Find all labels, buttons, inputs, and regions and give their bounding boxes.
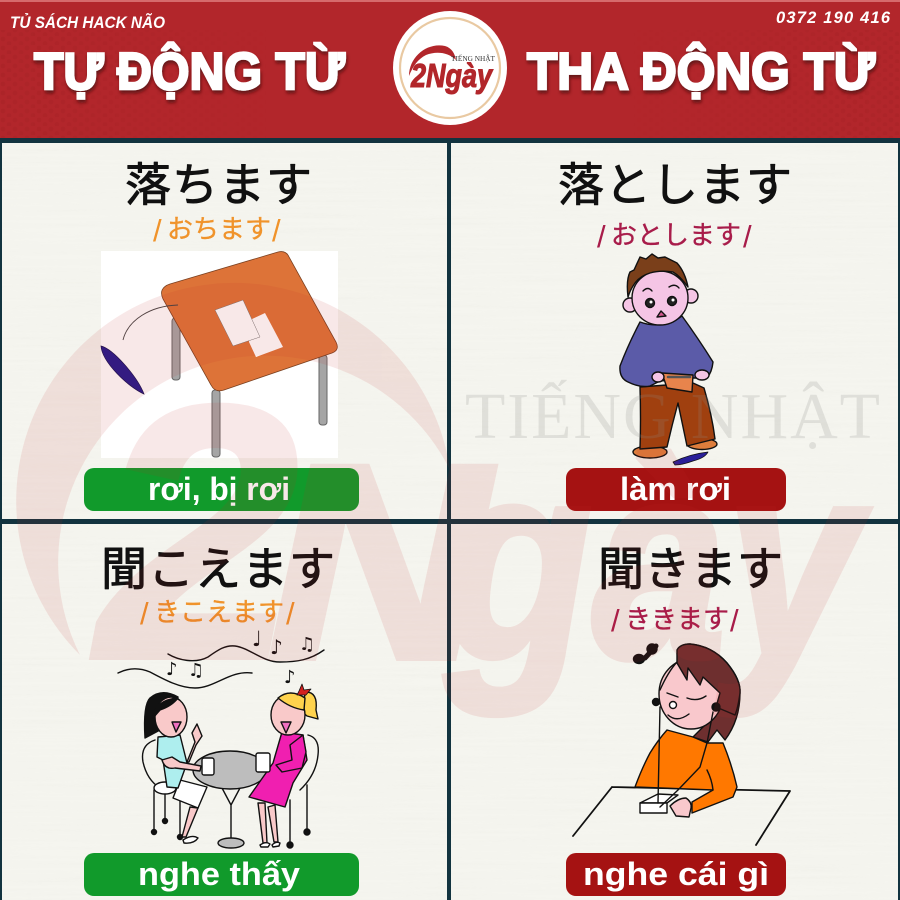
music notes: ♪ xyxy=(284,667,296,688)
reading: otoshimasu: おとします xyxy=(611,220,741,250)
watermark: 2Ngày logo: N xyxy=(268,409,496,716)
music notes: ♪ xyxy=(270,635,283,659)
reading: otoshimasu: / xyxy=(743,219,752,254)
label pill: roi, bi roi xyxy=(84,468,359,511)
illustration: woman listening with earphones xyxy=(573,644,790,845)
word: ochimasu: 落ちます xyxy=(125,159,312,211)
music notes xyxy=(166,627,315,688)
reading: kikimasu xyxy=(611,603,739,638)
logo: 2Ngày: 2Ngày xyxy=(410,57,493,94)
word: otoshimasu: 落とします xyxy=(558,159,792,211)
reading: kikimasu: ききます xyxy=(625,604,729,634)
reading: otoshimasu: / xyxy=(597,219,606,254)
reading: kikimasu: / xyxy=(730,603,739,638)
illustration: table with falling pen xyxy=(101,251,338,458)
reading: kikoemasu: きこえます xyxy=(154,597,284,627)
word: kikimasu: 聞きます xyxy=(598,543,783,595)
word: kikoemasu: 聞こえます xyxy=(101,543,335,595)
panel: top left, fall xyxy=(84,159,359,511)
panel: top right, drop xyxy=(558,159,792,511)
reading: ochimasu xyxy=(153,213,281,248)
illustration: boy dropping pen from pocket xyxy=(620,254,717,465)
label: phone number: 0372 190 416 xyxy=(776,9,891,27)
label pill: lam roi xyxy=(566,468,786,511)
label pill: lam roi: làm rơi xyxy=(620,471,731,507)
reading: ochimasu: おちます xyxy=(167,214,271,244)
music note xyxy=(645,646,656,658)
reading: kikoemasu: / xyxy=(140,596,149,631)
logo: 2Ngày: TIẾNG NHẬT xyxy=(451,53,495,63)
panel: bottom right, listen xyxy=(566,543,790,896)
label pill: nghe thay xyxy=(84,853,359,896)
heading: transitive verb: THA ĐỘNG TỪ xyxy=(527,42,876,101)
header banner xyxy=(0,0,900,138)
right chair xyxy=(290,735,318,845)
logo: 2Ngày xyxy=(393,11,507,125)
reading: ochimasu: / xyxy=(272,213,281,248)
panel: bottom left, audible xyxy=(84,543,359,896)
table xyxy=(222,788,240,840)
label pill: nghe thay: nghe thấy xyxy=(138,856,300,892)
reading: kikoemasu: / xyxy=(286,596,295,631)
music notes: ♩ xyxy=(252,627,262,651)
music notes: ♫ xyxy=(188,660,204,681)
music notes: ♫ xyxy=(299,634,315,655)
illustration: two women talking at a cafe table xyxy=(118,627,324,848)
watermark: Tieng Nhat: TIẾNG NHẬT xyxy=(465,379,880,453)
left chair xyxy=(142,740,180,837)
label pill: nghe cai gi: nghe cái gì xyxy=(583,856,769,892)
watermark: 2Ngày logo xyxy=(16,283,873,734)
reading: kikimasu: / xyxy=(611,603,620,638)
right woman xyxy=(258,803,278,843)
music notes: ♪ xyxy=(166,659,178,680)
label pill: nghe cai gi xyxy=(566,853,786,896)
left woman xyxy=(182,807,198,837)
watermark: 2Ngày logo: 2 xyxy=(92,332,298,734)
label: book series: TỦ SÁCH HACK NÃO xyxy=(10,12,165,32)
label pill: roi, bi roi: rơi, bị rơi xyxy=(148,471,290,507)
reading: ochimasu: / xyxy=(153,213,162,248)
heading: intransitive verb: TỰ ĐỘNG TỪ xyxy=(34,42,346,101)
